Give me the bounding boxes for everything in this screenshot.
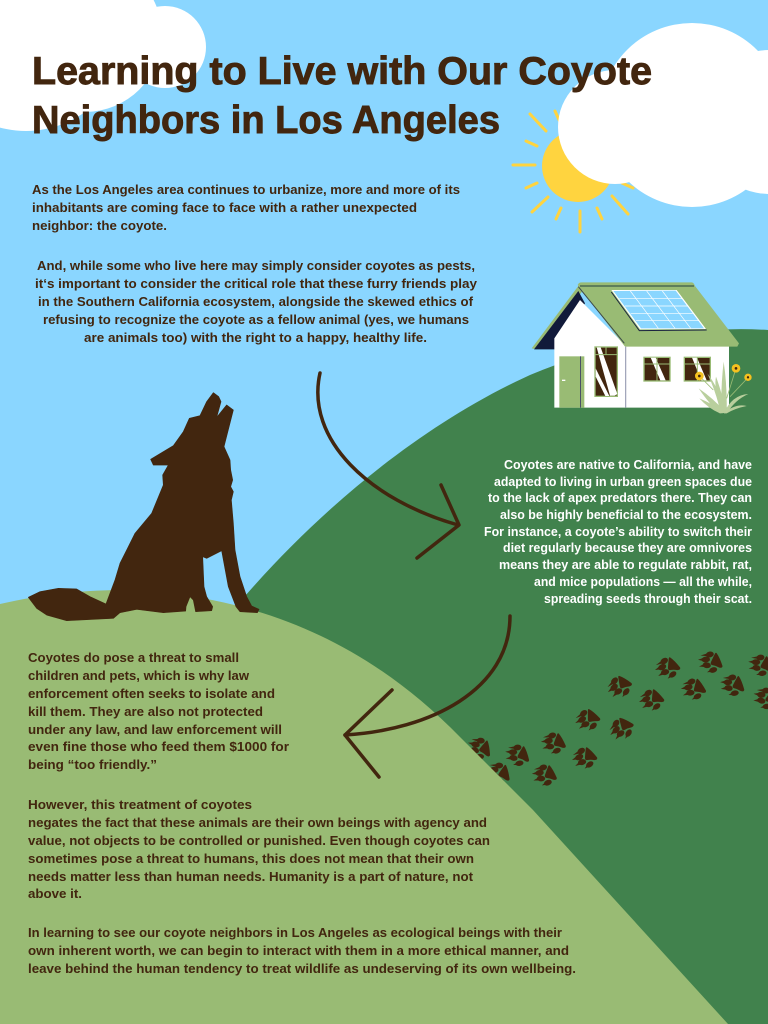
house <box>532 282 752 413</box>
coyote facts paragraph <box>484 457 752 606</box>
arrow: to coyote facts <box>318 373 459 558</box>
paw prints trail <box>464 651 768 788</box>
threats paragraph: enforcement often seeks to isolate and <box>28 686 275 701</box>
tall window <box>595 347 617 396</box>
threats paragraph: children and pets, which is why law <box>28 668 250 683</box>
coyote facts paragraph: diet regularly because they are omnivores <box>503 540 752 555</box>
treatment paragraph: However, this treatment of coyotes <box>28 797 252 812</box>
intro paragraph: As the Los Angeles area continues to urbanize, more and more of its <box>32 182 460 197</box>
intro paragraph: inhabitants are coming face to face with a rather unexpected <box>32 200 417 215</box>
coyote facts paragraph: For instance, a coyote’s ability to switch their <box>484 524 752 539</box>
threats paragraph: under any law, and law enforcement will <box>28 722 282 737</box>
second intro paragraph: refusing to recognize the coyote as a fellow animal (yes, we humans <box>43 312 469 327</box>
threats paragraph: being “too friendly.” <box>28 757 157 772</box>
coyote facts paragraph: Coyotes are native to California, and have <box>504 457 752 472</box>
threats paragraph: kill them. They are also not protected <box>28 704 263 719</box>
treatment paragraph <box>28 797 490 901</box>
title: Neighbors in Los Angeles <box>32 99 500 142</box>
coyote facts paragraph: spreading seeds through their scat. <box>544 591 752 606</box>
coyote silhouette <box>28 393 259 621</box>
conclusion paragraph: In learning to see our coyote neighbors in Los Angeles as ecological beings with their <box>28 925 562 940</box>
dark green hill <box>245 329 768 1024</box>
treatment paragraph: needs matter less than human needs. Humanity is a part of nature, not <box>28 869 474 884</box>
second intro paragraph: it‘s important to consider the critical role that these furry friends play <box>35 276 478 291</box>
threats paragraph: even fine those who feed them $1000 for <box>28 739 289 754</box>
intro paragraph <box>32 182 460 233</box>
conclusion paragraph <box>28 925 576 976</box>
coyote facts paragraph: means they are able to regulate rabbit, rat, <box>499 557 752 572</box>
solar panel <box>611 290 707 331</box>
grass and flowers <box>695 362 752 413</box>
coyote facts paragraph: to the lack of apex predators there. They can <box>488 490 752 505</box>
conclusion paragraph: own inherent worth, we can begin to interact with them in a more ethical manner, and <box>28 943 569 958</box>
second intro paragraph <box>35 258 478 345</box>
coyote facts paragraph: and mice populations — all the while, <box>534 574 752 589</box>
treatment paragraph: sometimes pose a threat to humans, this does not mean that their own <box>28 851 474 866</box>
sun <box>513 111 633 232</box>
light green hill <box>0 590 728 1024</box>
second intro paragraph: And, while some who live here may simply consider coyotes as pests, <box>37 258 475 273</box>
conclusion paragraph: leave behind the human tendency to treat wildlife as undeserving of its own wellbeing. <box>28 961 576 976</box>
side window one <box>644 357 670 381</box>
title <box>32 50 652 142</box>
cloud: top right <box>558 23 768 207</box>
cloud: top left <box>0 0 206 131</box>
threats paragraph: Coyotes do pose a threat to small <box>28 650 239 665</box>
treatment paragraph: negates the fact that these animals are their own beings with agency and <box>28 815 487 830</box>
intro paragraph: neighbor: the coyote. <box>32 218 167 233</box>
treatment paragraph: above it. <box>28 886 82 901</box>
coyote facts paragraph: adapted to living in urban green spaces due <box>494 474 752 489</box>
second intro paragraph: are animals too) with the right to a happy, healthy life. <box>84 330 427 345</box>
door <box>559 356 584 408</box>
side window two <box>684 357 710 381</box>
arrow: to threats text <box>345 616 510 777</box>
title: Learning to Live with Our Coyote <box>32 50 652 93</box>
treatment paragraph: value, not objects to be controlled or punished. Even though coyotes can <box>28 833 490 848</box>
second intro paragraph: in the Southern California ecosystem, alongside the skewed ethics of <box>38 294 474 309</box>
coyote facts paragraph: also be highly beneficial to the ecosystem. <box>500 507 752 522</box>
threats paragraph <box>28 650 289 772</box>
